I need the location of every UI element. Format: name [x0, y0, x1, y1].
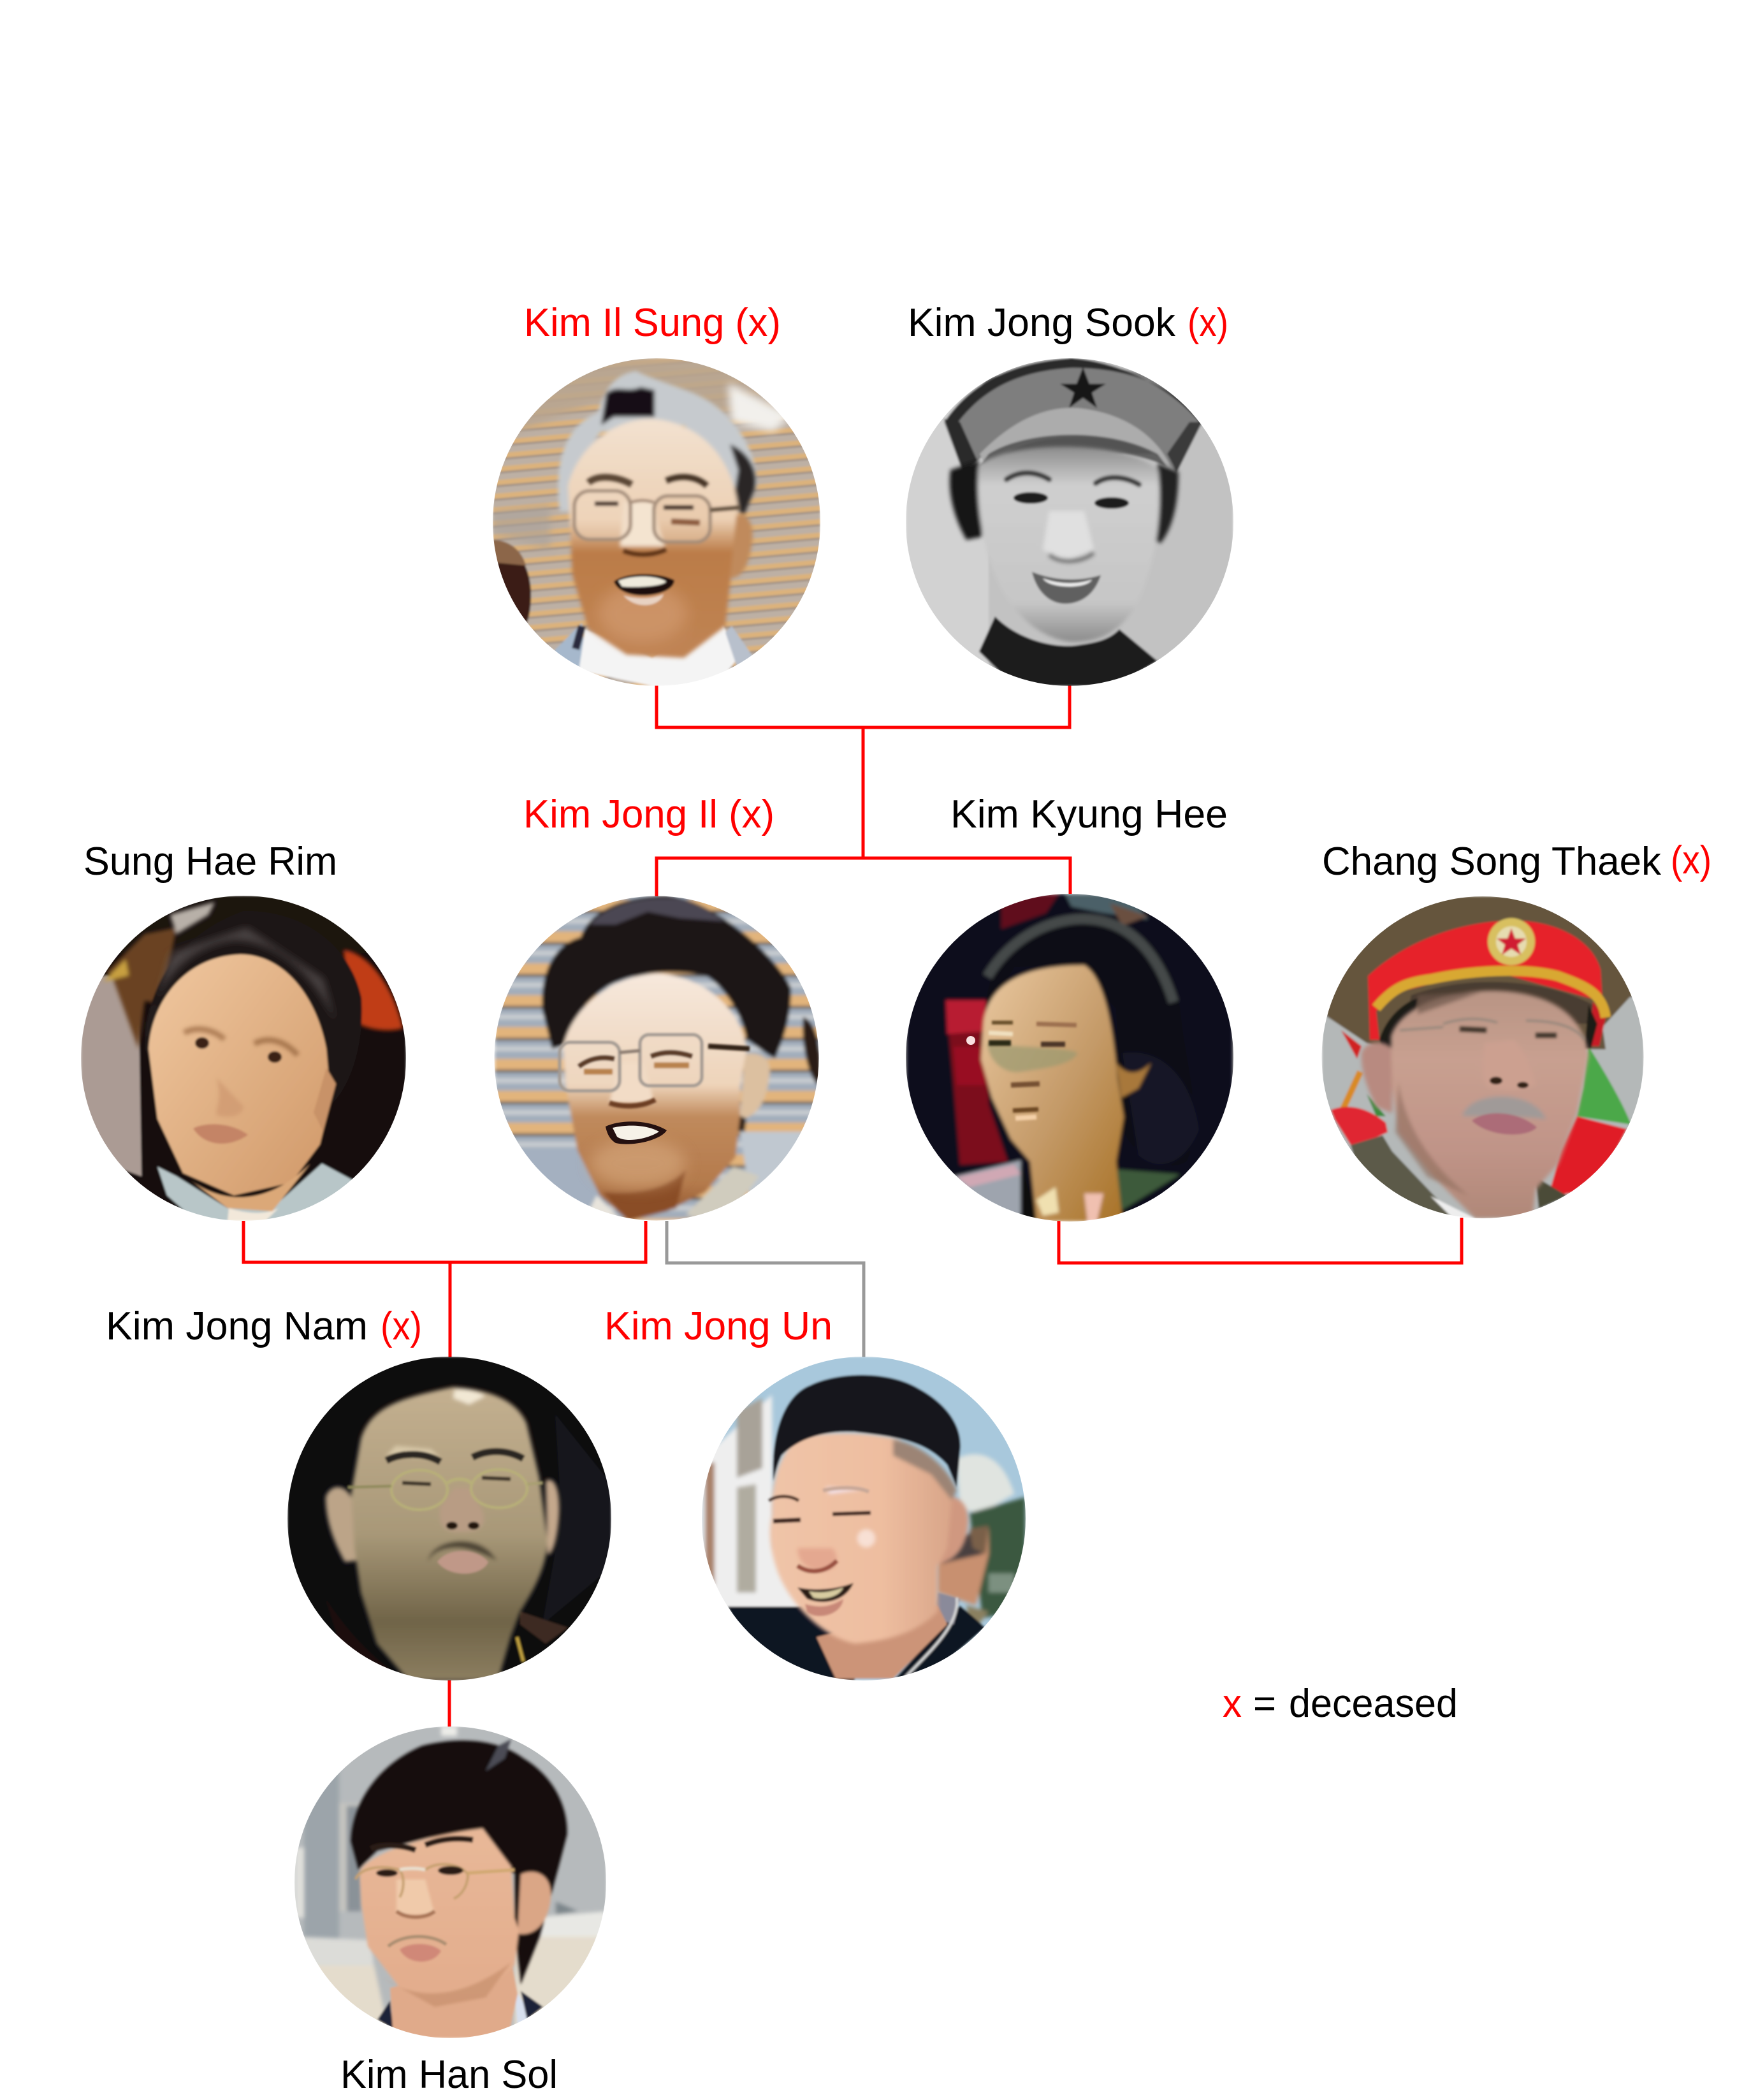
label: Kim Jong Sook: (x)	[1188, 301, 1228, 345]
portrait: Kim Il Sung	[493, 358, 820, 686]
label: Chang Song Thaek: Chang Song Thaek	[1322, 840, 1662, 884]
connector: Kim Kyung Hee and Chang Song Thaek	[1059, 1218, 1462, 1263]
portrait: Chang Song Thaek	[1322, 896, 1644, 1218]
portrait: Kim Jong Nam	[287, 1357, 611, 1681]
label: Kim Jong Il: Kim Jong Il (x)	[523, 792, 774, 836]
label: Kim Kyung Hee: Kim Kyung Hee	[950, 792, 1228, 836]
portrait: Kim Jong Il	[495, 896, 820, 1221]
connector: Kim Jong Nam to Kim Han Sol	[447, 1680, 451, 1727]
portrait: Kim Han Sol	[294, 1726, 606, 2038]
label: Kim Jong Sook: Kim Jong Sook	[908, 301, 1176, 345]
connector: Kim Jong Il to Kim Jong Un	[667, 1221, 864, 1357]
legend: x = deceased: deceased	[1289, 1682, 1458, 1726]
connector: Kim Il Sung and Kim Jong Sook to children	[657, 685, 1070, 896]
family tree chart	[81, 307, 1710, 2089]
label: Chang Song Thaek: (x)	[1671, 838, 1711, 882]
portrait: Kim Kyung Hee	[906, 894, 1233, 1221]
portrait: Kim Jong Sook	[906, 358, 1233, 686]
label: Kim Jong Nam: (x)	[381, 1304, 422, 1348]
label: Kim Jong Un: Kim Jong Un	[604, 1304, 832, 1348]
portrait: Kim Jong Un	[702, 1357, 1026, 1681]
legend: x = deceased: =	[1253, 1682, 1276, 1726]
label: Kim Jong Nam: Kim Jong Nam	[106, 1304, 368, 1348]
label: Sung Hae Rim: Sung Hae Rim	[84, 840, 337, 884]
connector: Sung Hae Rim and Kim Jong Il to Kim Jong Nam	[243, 1221, 646, 1357]
label: Kim Han Sol: Kim Han Sol	[340, 2053, 558, 2097]
portrait: Sung Hae Rim	[81, 896, 406, 1221]
legend: x = deceased: x	[1223, 1682, 1242, 1726]
label: Kim Il Sung: Kim Il Sung (x)	[524, 301, 781, 345]
